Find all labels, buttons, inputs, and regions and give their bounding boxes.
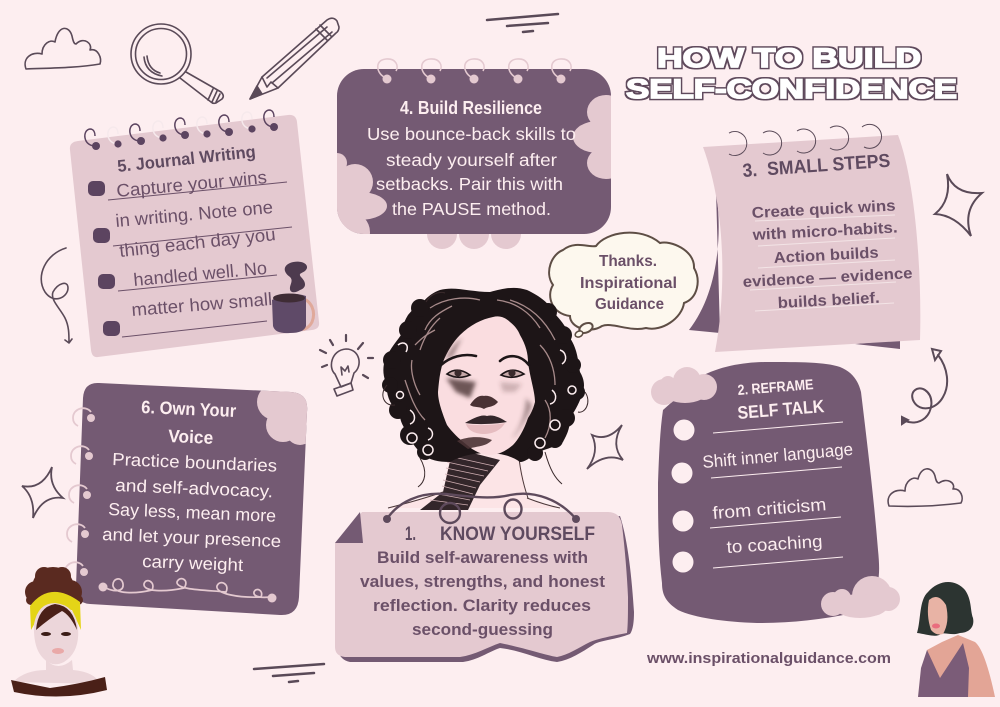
decorative lines bottom [254,664,324,682]
body text [115,167,277,320]
heading: 5. Journal Writing [116,142,257,176]
doodle: star right [935,174,982,236]
body text: builds belief. [777,290,880,312]
body text: and let your presence [102,524,281,551]
body text: matter how small [131,289,273,320]
body text: steady yourself after [386,150,557,170]
body text: in writing. Note one [115,197,274,231]
doodle: star left [22,467,63,518]
decorative lines top [487,14,558,32]
body text [102,449,281,575]
body text: and self-advocacy. [115,475,274,501]
body text: handled well. No [133,258,268,290]
panel 4: build resilience [327,59,625,252]
panel 5: journal writing [70,110,319,357]
heading: SELF TALK [737,396,825,423]
face [438,316,535,455]
doodle: curly arrow right [902,349,947,424]
icon: light bulb [320,335,373,396]
panel 2: reframe self talk [651,362,900,623]
panel 6: own your voice [65,383,314,615]
heading: 2. REFRAME [737,377,814,399]
body text [367,124,576,219]
body text: values, strengths, and honest [360,573,606,591]
body text [742,197,913,312]
heading [141,397,237,448]
body text: to coaching [726,531,823,557]
body text: from criticism [712,494,827,523]
body text: Capture your wins [116,167,268,201]
heading: 4. Build Resilience [400,98,542,118]
bubble text: Thanks. [599,253,657,270]
body text: Create quick wins [751,197,896,222]
panel 3: small steps [689,124,920,352]
eyes [447,369,524,377]
heading: KNOW YOURSELF [440,524,595,545]
title: SELF-CONFIDENCE [626,74,957,104]
heading: Voice [168,426,214,448]
title [626,43,957,104]
heading: 1. [405,524,416,545]
website url: www.inspirationalguidance.com [646,650,891,667]
body text: Action builds [773,245,879,267]
thought bubble [549,233,698,338]
bubble text: Inspirational [580,275,677,292]
body text [360,549,606,639]
lips [465,415,507,434]
doodle: cloud right [888,469,962,506]
body text: second-guessing [412,621,553,639]
heading: 3. SMALL STEPS [742,151,891,182]
decorative curl line [98,579,276,602]
illustration: woman portrait [382,288,588,510]
spiral binding [387,494,576,523]
title: HOW TO BUILD [657,43,921,73]
heading [737,377,825,423]
icon: pencil [250,18,339,99]
eyebrows [441,355,529,365]
cloud top [651,367,717,405]
body text: Use bounce-back skills to [367,124,576,144]
illustration: woman with dark hair [917,582,995,697]
heading: 6. Own Your [141,397,237,421]
doodle: cloud top left [25,28,101,69]
body text: with micro-habits. [751,219,898,244]
body text: carry weight [142,551,244,575]
body text: thing each day you [118,224,277,261]
body text: Shift inner language [702,439,854,472]
bubble text: Guidance [595,296,664,313]
body text: the PAUSE method. [392,199,551,219]
panel 1: know yourself [335,494,634,662]
hair [383,288,584,462]
doodle: curly arrow left [41,248,72,343]
body text: evidence — evidence [742,265,913,291]
body text: Say less, mean more [108,499,277,526]
icon: magnifying glass [131,24,223,103]
face shading [445,338,532,449]
doodle: star centre [587,425,623,469]
icon: coffee cup [272,262,314,333]
body text: Practice boundaries [112,449,278,476]
neck [388,445,560,508]
body text: Build self-awareness with [377,549,588,567]
cloud bottom [821,576,900,618]
bubble text [580,253,677,313]
illustration: woman with yellow headband [11,567,107,697]
body text [702,439,854,557]
body text: reflection. Clarity reduces [373,597,591,615]
body text: setbacks. Pair this with [376,174,563,194]
